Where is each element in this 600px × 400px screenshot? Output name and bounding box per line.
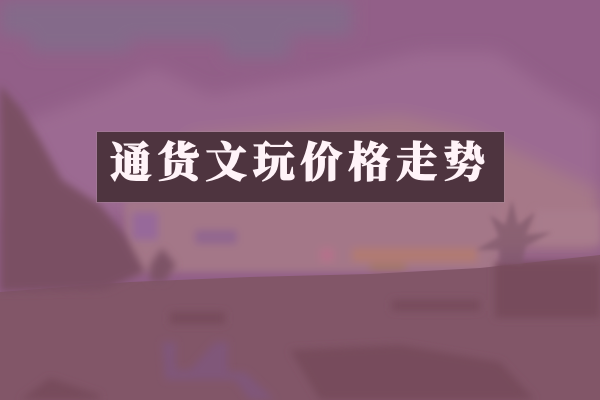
title text: 通货文玩价格走势 (110, 141, 491, 187)
ground (0, 255, 600, 400)
title banner (97, 132, 504, 202)
sky (0, 0, 600, 280)
evening glow near the horizon (125, 200, 600, 272)
tree line on the left (0, 85, 176, 292)
bare tree on the right (476, 200, 552, 264)
